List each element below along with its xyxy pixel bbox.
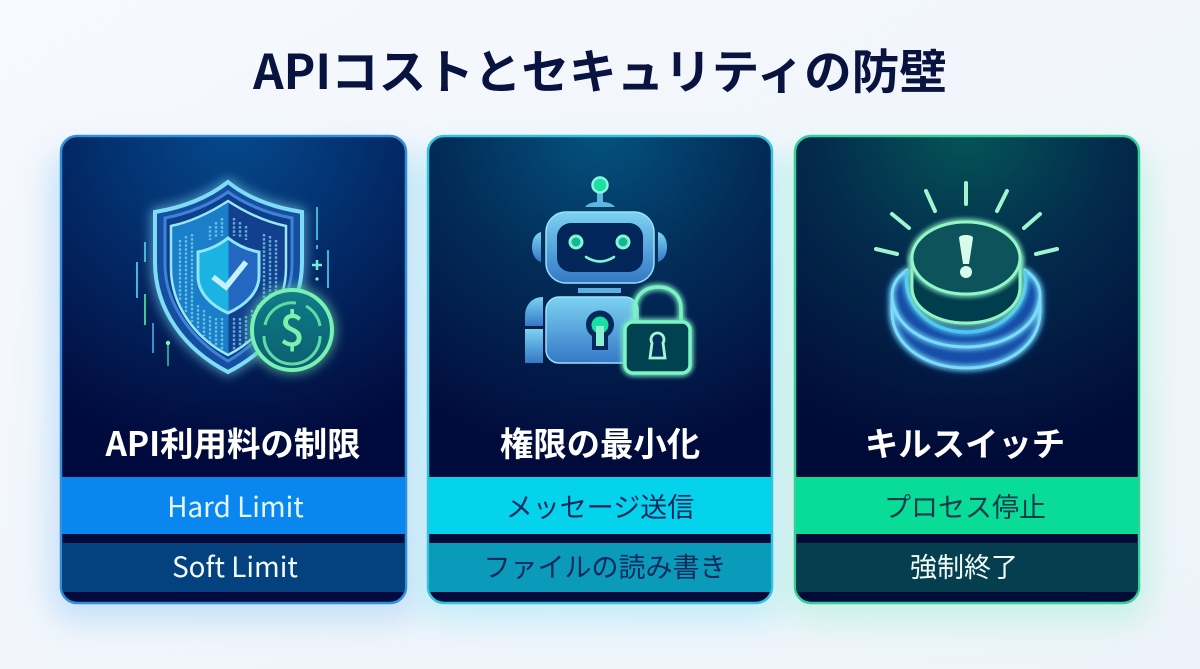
- panel: API利用料の制限: [61, 136, 406, 603]
- bar: 強制終了: 強制終了: [910, 546, 1018, 585]
- heading: API利用料の制限: [104, 417, 361, 466]
- bar: Soft Limit: Soft Limit: [172, 546, 298, 586]
- panel: 権限の最小化: [428, 136, 772, 603]
- panel: キルスイッチ: [795, 136, 1139, 603]
- heading: 権限の最小化: [500, 417, 700, 466]
- bar: メッセージ送信: メッセージ送信: [506, 486, 694, 525]
- icon: robot with padlock: [525, 178, 690, 373]
- bar: Hard Limit: [61, 477, 406, 534]
- bar: ファイルの読み書き: [428, 543, 772, 592]
- title: APIコストとセキュリティの防壁: [252, 34, 947, 103]
- bar: プロセス停止: [795, 477, 1139, 534]
- bar: 強制終了: [795, 543, 1139, 592]
- icon: shield with dollar coin: $: [279, 295, 305, 359]
- icon: emergency stop button: [876, 183, 1057, 368]
- icon: shield with dollar coin: [137, 182, 332, 372]
- bar: ファイルの読み書き: ファイルの読み書き: [484, 546, 726, 585]
- bar: メッセージ送信: [428, 477, 772, 534]
- bar: プロセス停止: プロセス停止: [884, 486, 1046, 525]
- bar: Soft Limit: [61, 543, 406, 592]
- bar: Hard Limit: Hard Limit: [167, 486, 304, 526]
- heading: キルスイッチ: [865, 417, 1065, 466]
